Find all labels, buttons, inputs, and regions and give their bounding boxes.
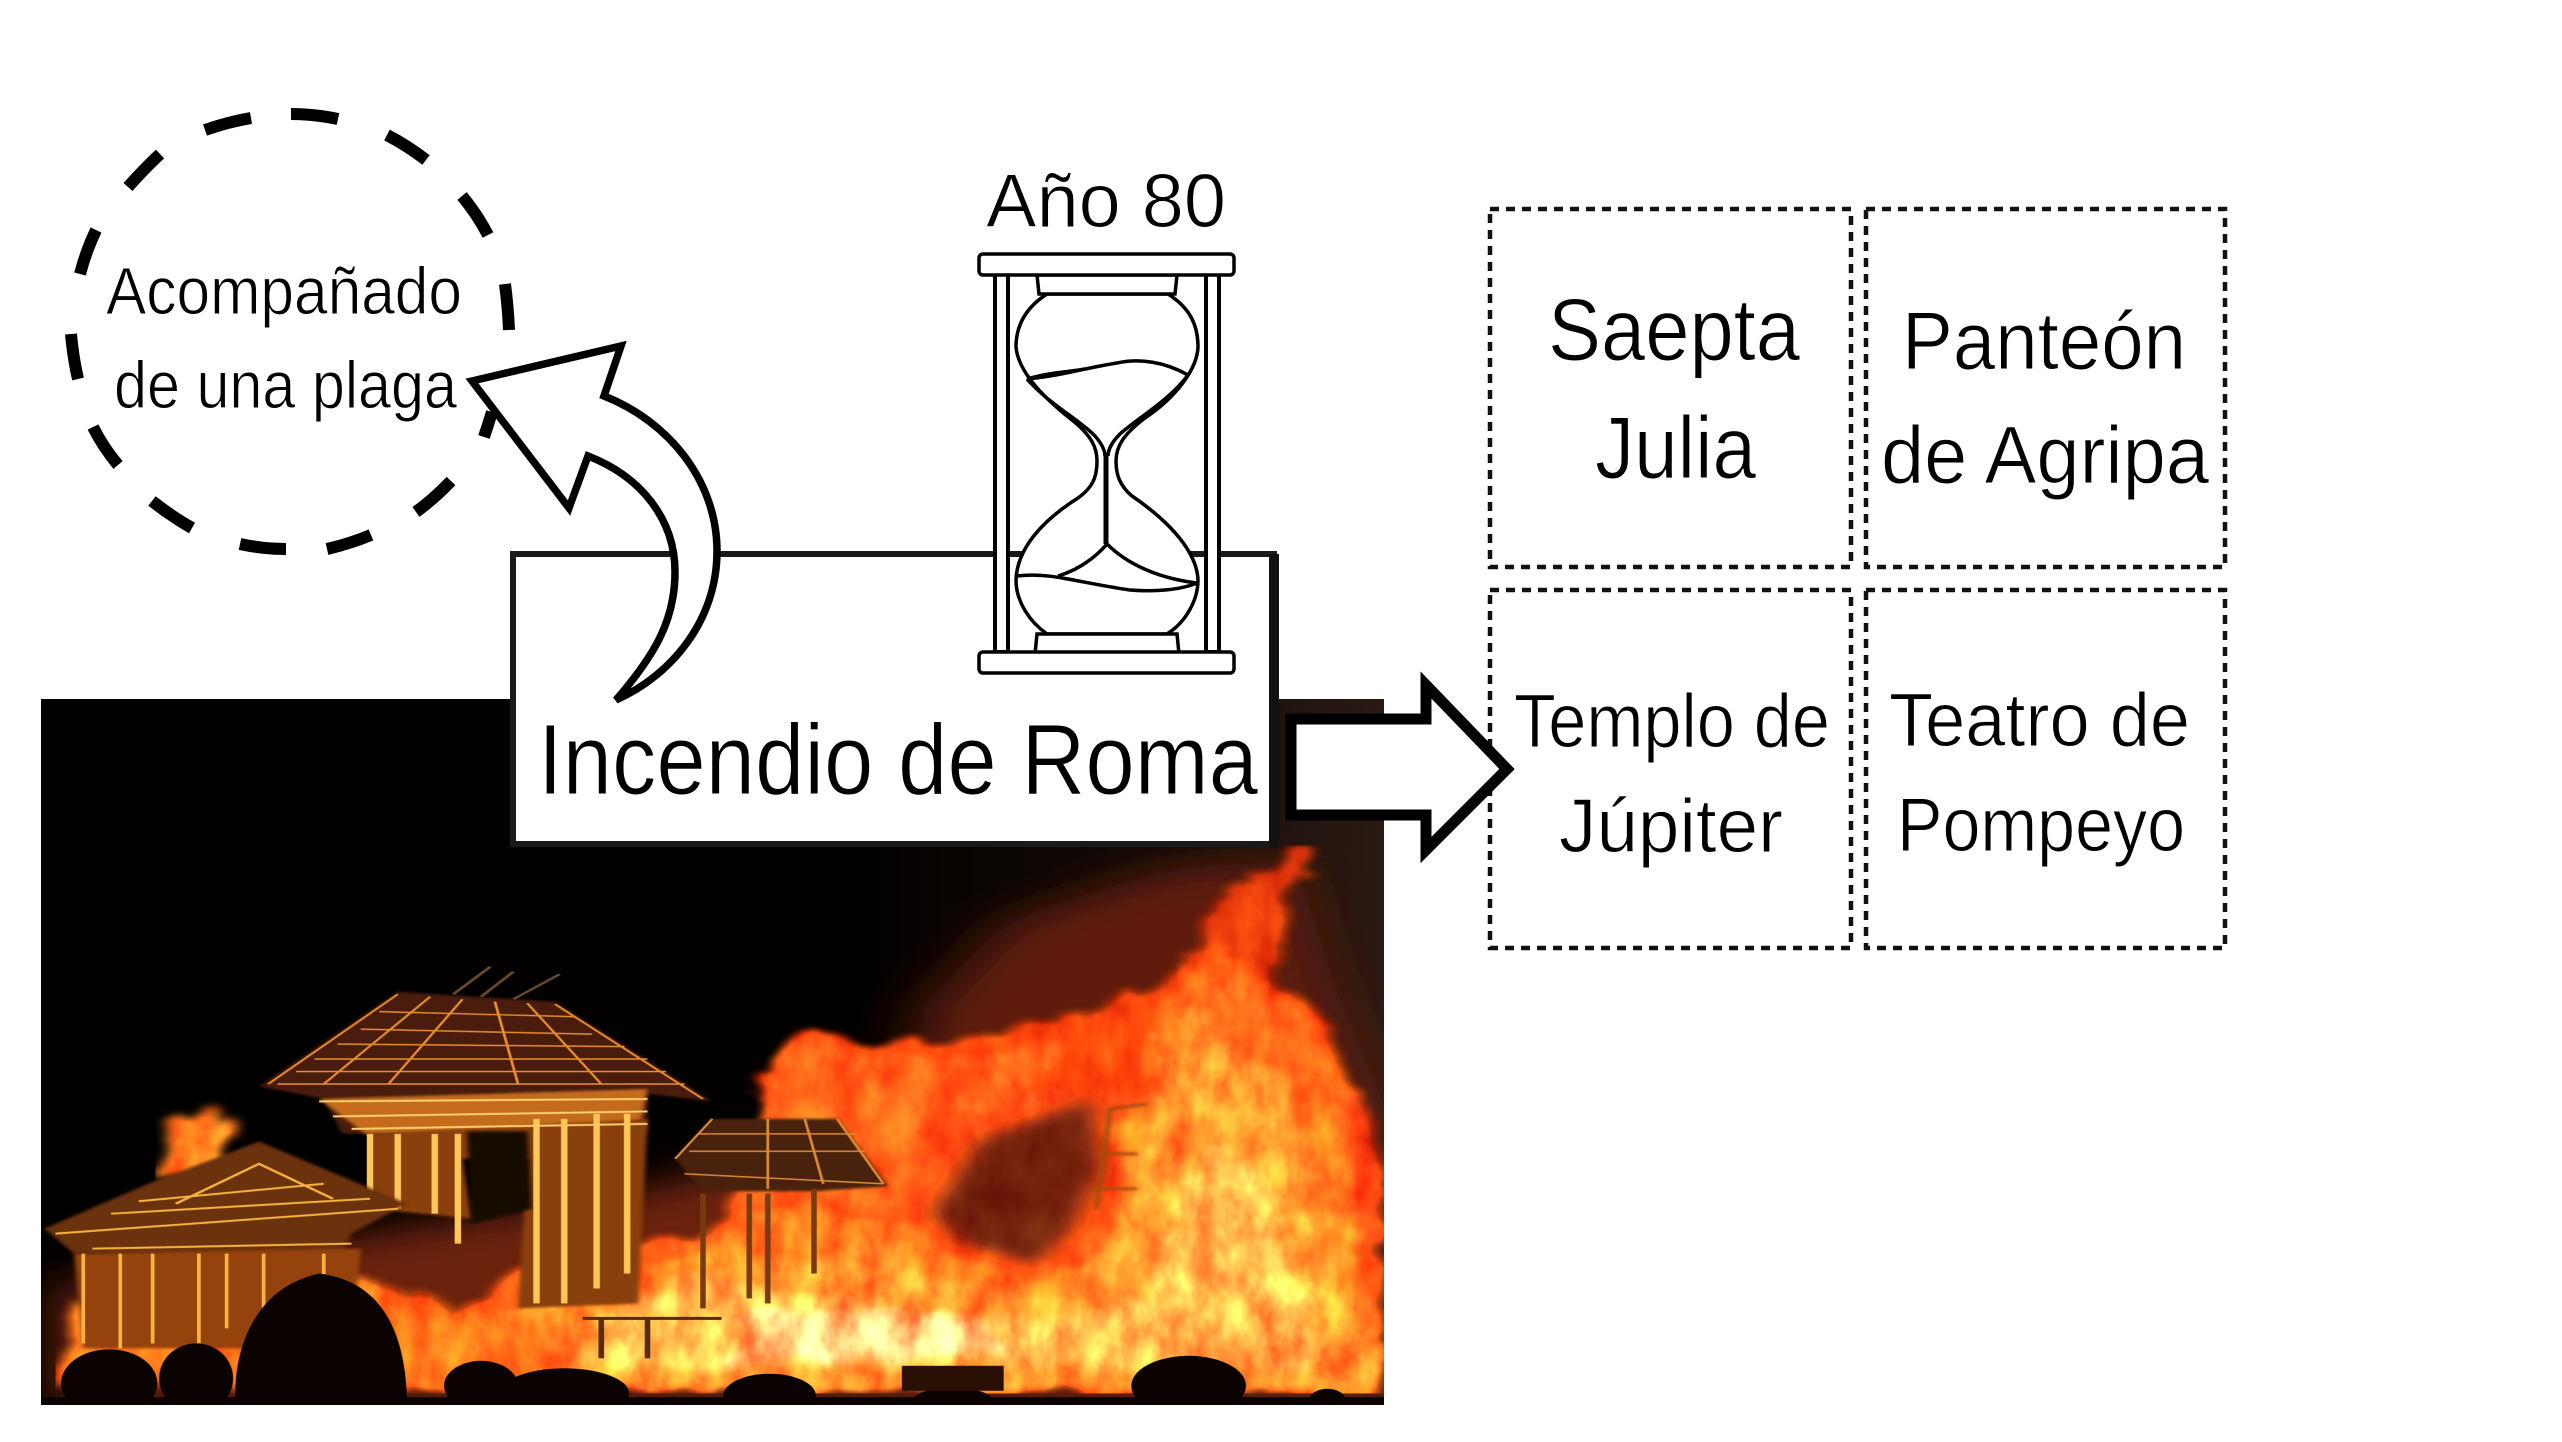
dashed box: Panteón de Agripa: Panteón (1902, 296, 2186, 387)
icon: hourglass (979, 254, 1234, 673)
dark red smoke haze (56, 860, 1388, 1408)
bright flame (481, 1009, 1378, 1388)
circle text: Acompañado (106, 254, 462, 329)
large temple frame (259, 967, 712, 1308)
dashed box: Saepta Julia: Saepta (1548, 280, 1800, 379)
dashed box: Templo de Júpiter: Templo de (1514, 679, 1830, 764)
circle text (106, 254, 462, 423)
dashed circle: Acompañado de una plaga (71, 114, 509, 549)
circle text: de una plaga (114, 348, 458, 423)
small left temple frame (44, 1141, 407, 1348)
bottom sand (1017, 575, 1197, 591)
dashed box: Panteón de Agripa: de Agripa (1881, 410, 2209, 501)
scaffold in right flame (1092, 1104, 1147, 1209)
main box: Incendio de Roma (513, 554, 1279, 847)
curved arrow to circle (472, 346, 717, 700)
right arrow (1291, 685, 1507, 850)
dark hollow in flames (930, 1099, 1101, 1266)
small right temple frame (583, 1119, 888, 1358)
dashed box: Teatro de Pompeyo: Teatro de (1889, 678, 2190, 763)
audience silhouettes (41, 1274, 1386, 1419)
photo: burning wooden buildings at night (41, 699, 1388, 1419)
back flame orange (388, 846, 1386, 1393)
dashed box: Panteón de Agripa (1866, 209, 2225, 567)
falling stream (1104, 456, 1108, 544)
dashed box: Templo de Júpiter (1490, 590, 1851, 948)
dashed box: Teatro de Pompeyo (1866, 590, 2225, 948)
dashed box: Saepta Julia: Julia (1595, 398, 1756, 497)
dashed box: Templo de Júpiter: Júpiter (1559, 784, 1783, 869)
yellow core (574, 1144, 1323, 1368)
top sand (1027, 361, 1188, 379)
dashed box: Teatro de Pompeyo: Pompeyo (1897, 783, 2185, 868)
mid flame (407, 939, 1386, 1388)
dashed box: Saepta Julia (1490, 209, 1851, 567)
flame on left tower (166, 1109, 240, 1174)
heading: Incendio de Roma (538, 704, 1258, 816)
label: Año 80: Año 80 (986, 159, 1226, 244)
